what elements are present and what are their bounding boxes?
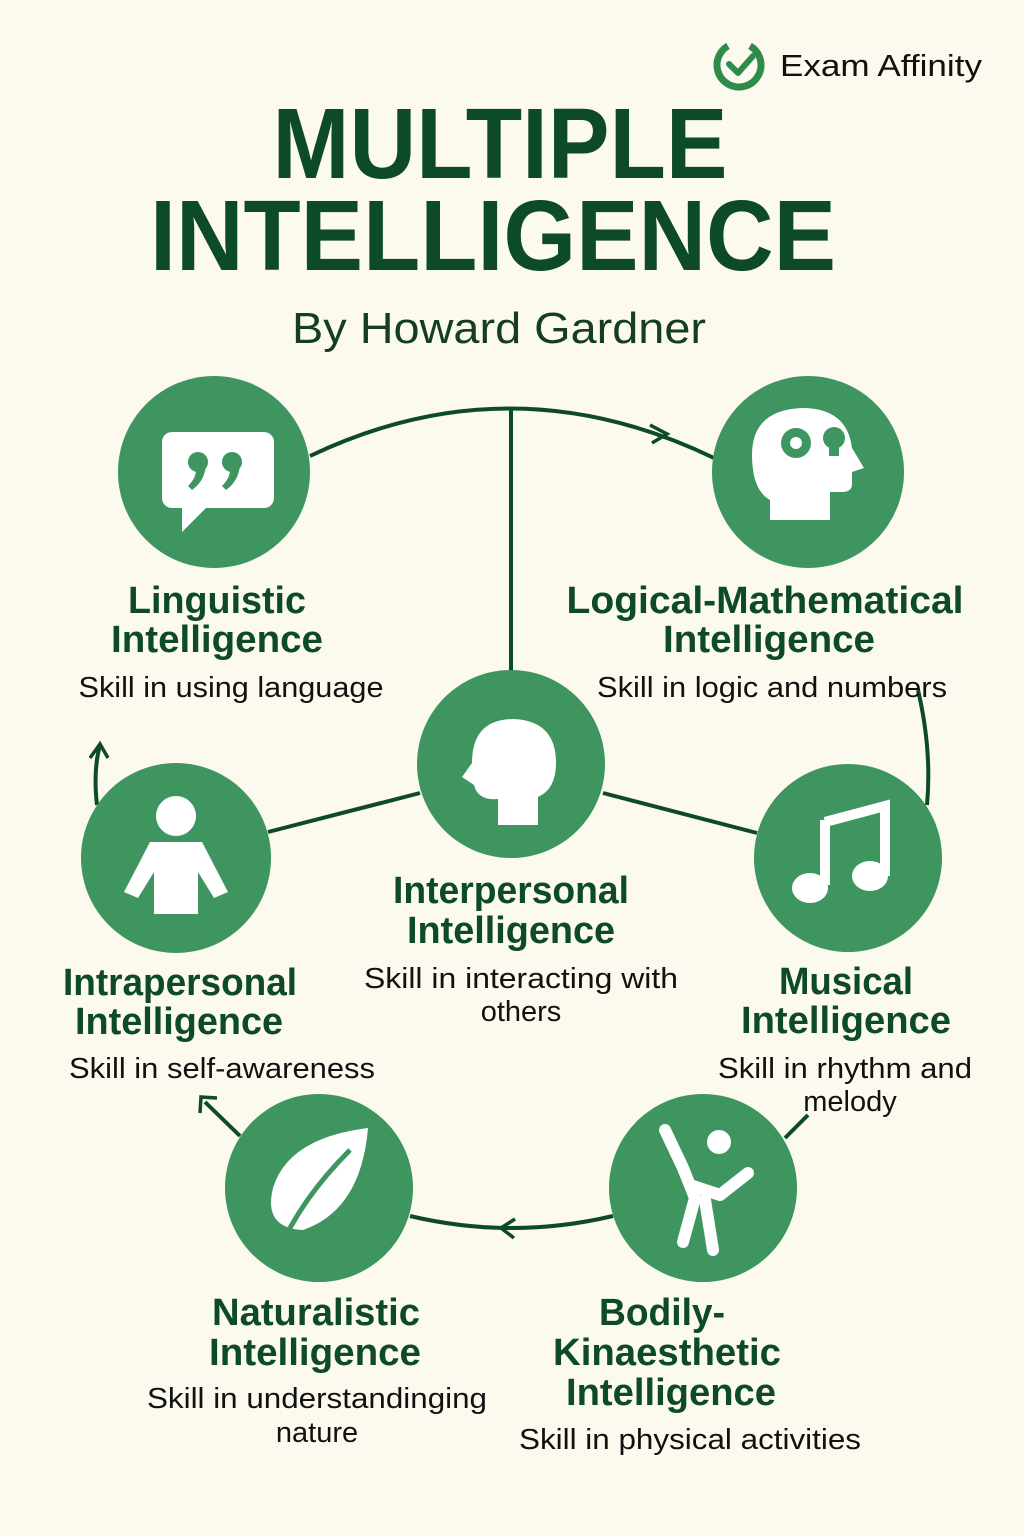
descriptions: Skill in understandinging [147,1383,487,1415]
labels: Linguistic [128,580,306,622]
title: MULTIPLE [272,88,728,200]
labels: Intelligence [566,1372,776,1414]
labels: Intelligence [75,1001,283,1043]
labels: Intrapersonal [63,962,297,1004]
title: INTELLIGENCE [150,180,836,292]
circle: linguistic [118,376,310,568]
labels: Musical [779,961,913,1003]
descriptions: Skill in interacting with [364,963,678,995]
descriptions: Skill in self-awareness [69,1053,375,1085]
labels: Kinaesthetic [553,1332,781,1374]
descriptions: Skill in logic and numbers [597,672,947,704]
circle: musical [754,764,942,952]
connectors [90,408,928,1238]
title [150,88,836,292]
descriptions: nature [276,1417,358,1449]
circle: intrapersonal [81,763,271,953]
logo: Exam Affinity [780,48,983,83]
labels: Intelligence [111,619,323,661]
circle: bodily [609,1094,797,1282]
labels [63,580,964,1414]
descriptions: melody [803,1086,897,1118]
labels: Naturalistic [212,1292,420,1334]
descriptions: Skill in rhythm and [718,1053,972,1085]
subtitle: By Howard Gardner [292,304,706,353]
circle: naturalistic [225,1094,413,1282]
descriptions: others [481,996,561,1028]
labels: Intelligence [407,910,615,952]
labels: Intelligence [663,619,875,661]
descriptions: Skill in physical activities [519,1424,861,1456]
circle: interpersonal [417,670,605,858]
labels: Bodily- [599,1292,725,1334]
descriptions [69,672,972,1456]
labels: Interpersonal [393,870,629,912]
labels: Intelligence [741,1000,951,1042]
logo [709,35,983,95]
circle: logical [712,376,904,568]
labels: Logical-Mathematical [566,580,964,622]
descriptions: Skill in using language [78,672,384,704]
labels: Intelligence [209,1332,421,1374]
